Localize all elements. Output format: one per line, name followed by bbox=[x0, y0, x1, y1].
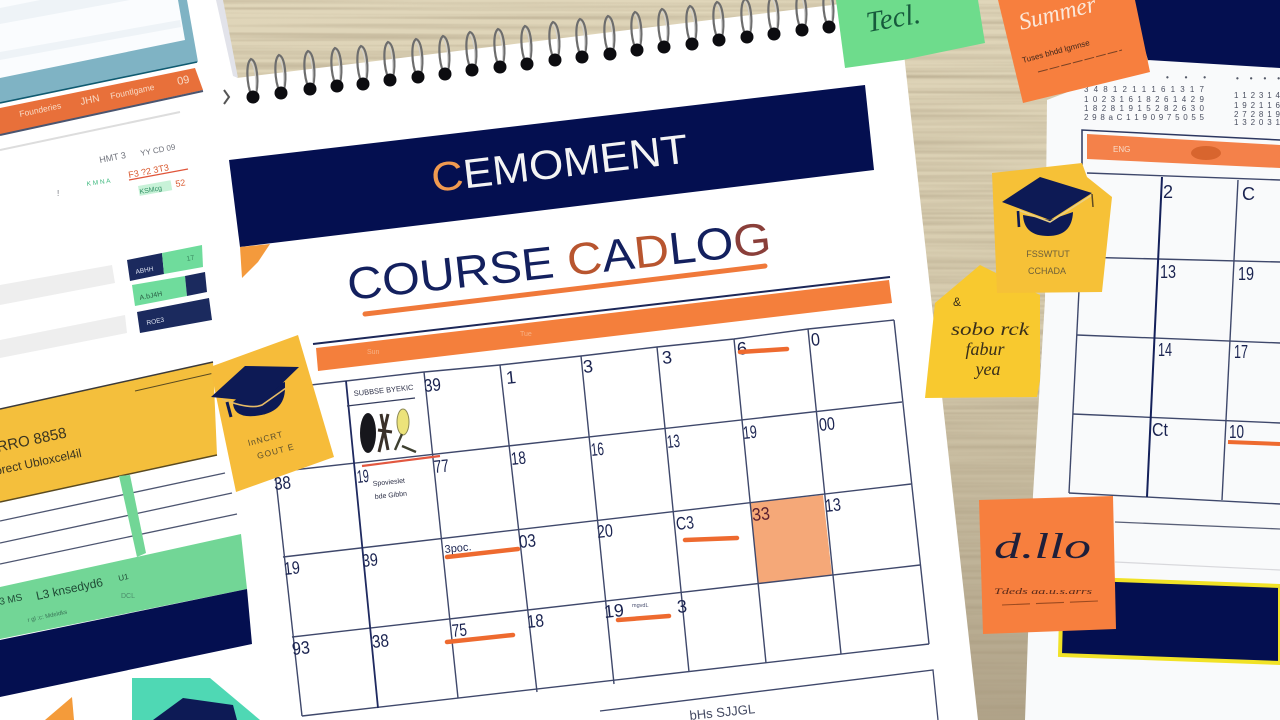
binding arrow mark bbox=[224, 90, 229, 104]
featured cell with illustration: SUBBSE BYEKIC bbox=[353, 383, 414, 398]
mini month calendars: 1 9 2 1 1 6 bbox=[1234, 101, 1280, 110]
green vertical connector bbox=[119, 475, 146, 557]
ruled lines under banner bbox=[0, 473, 237, 564]
right calendar dates: 13 bbox=[1160, 262, 1176, 282]
note caption: FSSWTUT bbox=[1026, 249, 1070, 259]
banner heading: CEMOMENT bbox=[429, 126, 690, 201]
green program band: DCL bbox=[121, 593, 135, 600]
right calendar dates: Ct bbox=[1152, 420, 1168, 440]
orange weekday bar bbox=[1087, 134, 1280, 168]
calendar date numbers: 19 bbox=[742, 422, 758, 443]
yellow sticky note with handwritten text: & bbox=[953, 295, 961, 309]
orange weekday header: Sun bbox=[367, 349, 380, 356]
mini month calendars: • • • bbox=[1166, 73, 1206, 82]
right calendar grid bbox=[1069, 173, 1280, 504]
orange handwritten sticky note bbox=[979, 496, 1116, 634]
legend pill: third bbox=[137, 298, 212, 333]
calendar date numbers: 3 bbox=[582, 356, 594, 377]
small table labels: YY CD 09 bbox=[140, 142, 177, 158]
yellow course banner bbox=[0, 362, 217, 502]
calendar date numbers: 00 bbox=[818, 413, 836, 435]
main and left page sheet bbox=[0, 0, 978, 720]
calendar date numbers: 77 bbox=[433, 456, 450, 477]
legend pill: first bbox=[127, 245, 203, 281]
teal sticky note with cap bbox=[132, 678, 260, 720]
green program band bbox=[0, 534, 247, 639]
orange weekday header bbox=[313, 277, 892, 371]
calendar date numbers: 33 bbox=[751, 503, 771, 525]
orange handwritten sticky note: d.llo bbox=[994, 526, 1091, 566]
mini month calendars bbox=[1084, 73, 1280, 127]
lower ruled lines bbox=[1115, 522, 1280, 570]
small table labels: F3 ?2 3T3 bbox=[127, 162, 170, 180]
orange panel strip bbox=[0, 68, 203, 135]
highlighted calendar cell bbox=[750, 495, 832, 583]
orange weekday header: Tue bbox=[520, 331, 532, 338]
calendar date numbers: 6 bbox=[736, 338, 748, 359]
orange corner fold bbox=[240, 244, 270, 278]
main calendar grid bbox=[266, 320, 929, 716]
calendar date numbers: C3 bbox=[675, 512, 695, 534]
small table labels: ! bbox=[57, 189, 59, 198]
right calendar dates: 2 bbox=[1163, 182, 1173, 202]
right calendar dates: 19 bbox=[1238, 264, 1254, 284]
mini month calendars: 1 1 2 3 1 4 bbox=[1234, 91, 1280, 100]
featured cell with illustration bbox=[347, 383, 440, 501]
calendar date numbers: 75 bbox=[451, 620, 468, 641]
calendar date numbers: mgvdL bbox=[632, 603, 649, 609]
note caption bbox=[1026, 249, 1070, 276]
right calendar dates: C bbox=[1242, 184, 1255, 204]
calendar frame line bbox=[1082, 130, 1280, 165]
featured cell with illustration: bde Gibbn bbox=[374, 491, 407, 501]
orange panel strip: Founderies bbox=[18, 100, 62, 119]
note caption bbox=[247, 429, 296, 461]
note caption: GOUT E bbox=[256, 441, 296, 461]
mini month calendars: 2 7 2 8 1 9 bbox=[1234, 110, 1280, 119]
mini month calendars: • • • • bbox=[1236, 74, 1280, 83]
small table labels bbox=[57, 142, 188, 198]
left brochure page bbox=[0, 0, 260, 720]
calendar date numbers: 1 bbox=[505, 367, 517, 388]
yellow sticky note with cap bbox=[210, 335, 334, 492]
calendar date numbers: 39 bbox=[423, 374, 442, 396]
calendar date numbers: 03 bbox=[518, 530, 537, 552]
small table labels: 52 bbox=[175, 177, 186, 189]
legend pill: first: 17 bbox=[186, 255, 195, 263]
yellow graduation cap sticky note bbox=[992, 163, 1112, 293]
calendar date numbers: 16 bbox=[590, 439, 605, 460]
legend pill: first: ABHH bbox=[135, 266, 154, 276]
calendar date numbers: 93 bbox=[291, 637, 311, 659]
legend pill: second bbox=[132, 272, 207, 306]
green program band: L3 knsedyd6 bbox=[35, 575, 105, 603]
spiral binding rings bbox=[246, 0, 836, 104]
orange paper scrap bbox=[45, 697, 74, 720]
mini month calendars: 3 4 8 1 2 1 1 1 6 1 3 1 7 bbox=[1084, 85, 1205, 94]
featured cell with illustration: Spovieslet bbox=[372, 478, 405, 488]
green program band: r gl :c: Mdeldks bbox=[27, 610, 68, 624]
note caption: CCHADA bbox=[1028, 266, 1066, 276]
orange panel strip: Fountlgame bbox=[109, 82, 156, 101]
calendar date numbers: 3 bbox=[676, 596, 688, 617]
note caption: lnNCRT bbox=[247, 429, 284, 448]
orange handwritten sticky note: Tdeds aa.u.s.arrs bbox=[994, 587, 1092, 596]
calendar date numbers: 39 bbox=[361, 549, 379, 571]
right calendar page bbox=[1025, 0, 1280, 720]
calendar date numbers: 13 bbox=[666, 431, 681, 452]
right calendar dates: 14 bbox=[1158, 340, 1172, 360]
calendar date numbers: 3poc. bbox=[444, 541, 472, 556]
calendar date numbers: 19 bbox=[603, 600, 625, 622]
icon: graduation cap bbox=[211, 366, 299, 417]
right calendar dates: 10 bbox=[1229, 422, 1244, 442]
course catalog heading: COURSE CADLOG bbox=[345, 213, 774, 310]
green program band: U1 bbox=[118, 572, 130, 583]
yellow sticky note with handwritten text: fabur bbox=[965, 339, 1005, 359]
title banner bbox=[229, 85, 874, 247]
orange panel strip: JHN bbox=[79, 93, 101, 108]
calendar date numbers: 18 bbox=[526, 610, 545, 632]
calendar date numbers: 19 bbox=[283, 557, 301, 579]
small table labels: KSMcg bbox=[139, 185, 163, 196]
yellow sticky note with handwritten text: sobo rck bbox=[951, 319, 1030, 339]
faint divider bbox=[0, 112, 180, 150]
calendar date numbers: 20 bbox=[596, 520, 614, 542]
legend pill: second: A.bJ4H bbox=[139, 291, 163, 302]
orange event marks bbox=[447, 349, 787, 642]
navy footer block with yellow outline bbox=[1060, 578, 1280, 663]
teal framed panel bbox=[0, 0, 198, 103]
calendar date numbers: 0 bbox=[810, 329, 821, 350]
calendar date numbers: 3 bbox=[661, 347, 673, 368]
yellow sticky note with handwritten text: yea bbox=[974, 359, 1000, 379]
calendar date numbers bbox=[273, 329, 842, 659]
right calendar dates: 17 bbox=[1234, 342, 1248, 362]
green sticky note bbox=[836, 0, 985, 68]
navy footer band bbox=[0, 589, 252, 697]
mini month calendars: 1 0 2 3 1 6 1 8 2 6 1 4 2 9 bbox=[1084, 95, 1205, 104]
calendar date numbers: 38 bbox=[371, 630, 390, 652]
mini month calendars: 2 9 8 a C 1 1 9 0 9 7 5 0 5 5 bbox=[1084, 113, 1205, 122]
calendar date numbers: 19 bbox=[356, 466, 370, 487]
orange weekday bar: ENG bbox=[1113, 145, 1130, 154]
icon: graduation cap bbox=[1002, 177, 1093, 236]
calendar date numbers: 38 bbox=[273, 472, 292, 494]
heading underline bbox=[365, 266, 765, 314]
mini month calendars: 1 3 2 0 3 1 bbox=[1234, 118, 1280, 127]
orange summer sticky note bbox=[998, 0, 1150, 103]
yellow sticky note with handwritten text bbox=[925, 265, 1040, 398]
bottom notes box bbox=[600, 670, 938, 720]
orange summer sticky note: Tuses bhdd lgmnse bbox=[1021, 38, 1091, 65]
calendar date numbers: 18 bbox=[510, 448, 527, 469]
calendar date numbers: 13 bbox=[824, 494, 842, 516]
navy header block bbox=[1130, 0, 1280, 68]
right calendar dates bbox=[1152, 182, 1280, 444]
gray placeholder bars bbox=[0, 265, 127, 358]
small table labels: K M N A bbox=[86, 178, 112, 188]
legend pill: third: ROE3 bbox=[146, 317, 165, 327]
orange panel strip: 09 bbox=[176, 74, 191, 88]
mini month calendars: 1 8 2 8 1 9 1 5 2 8 2 6 3 0 bbox=[1084, 104, 1205, 113]
small table labels: HMT 3 bbox=[98, 150, 127, 165]
